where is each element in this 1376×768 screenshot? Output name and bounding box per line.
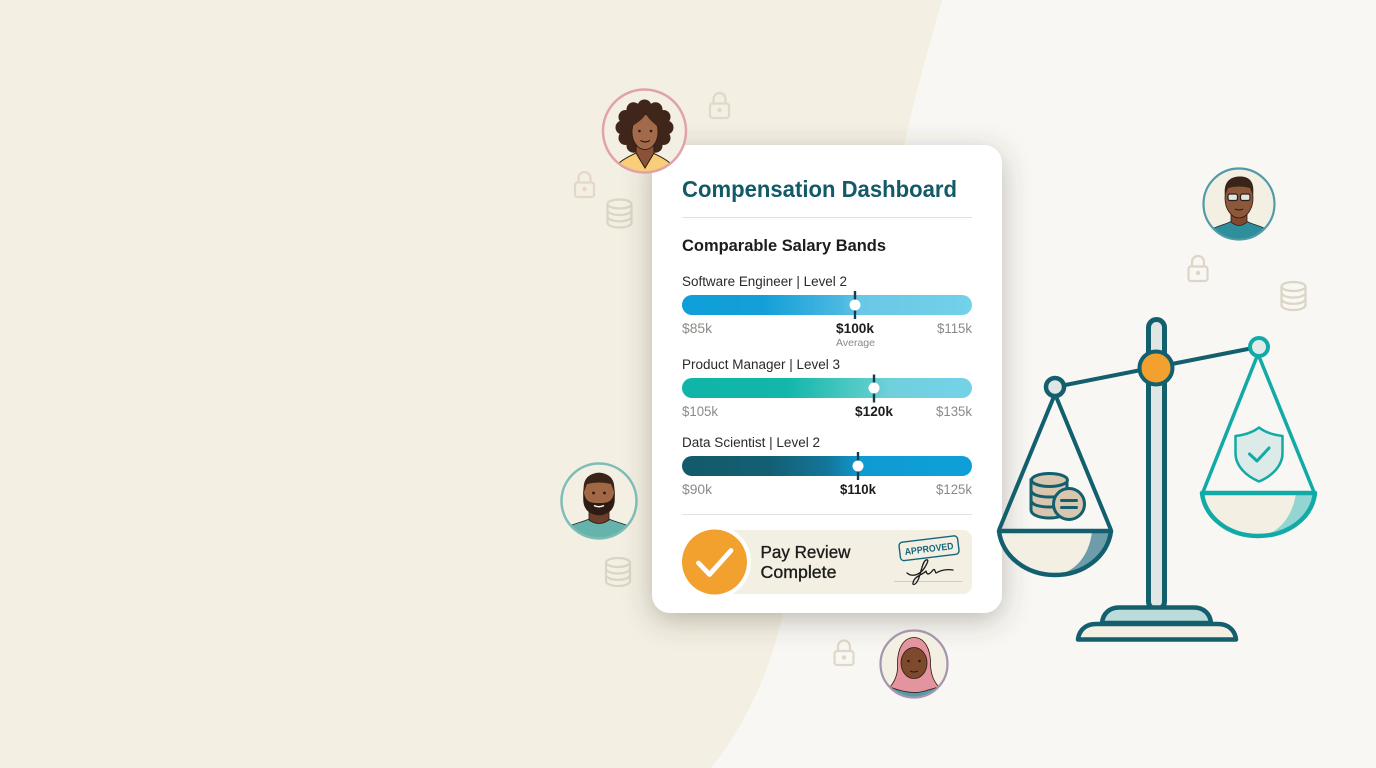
avatar: man with glasses <box>1200 168 1278 245</box>
band: product manager: $105k <box>682 404 718 419</box>
status: pay review complete: Pay Review <box>760 542 851 562</box>
band: data scientist: $110k <box>840 482 876 497</box>
stamp: approved <box>899 535 959 561</box>
band: software engineer: Average <box>836 337 875 349</box>
band: product manager: $120k <box>855 404 893 419</box>
icon: coin stack <box>1031 474 1084 520</box>
band: data scientist: Data Scientist | Level 2 <box>682 435 820 450</box>
right pan <box>1202 338 1320 540</box>
icon: database left lower <box>606 558 630 586</box>
band: software engineer: $85k <box>682 321 712 336</box>
icon: lock top <box>710 93 729 118</box>
status: pay review complete: Complete <box>760 562 836 582</box>
icon: shield check <box>1236 428 1282 482</box>
icon: lock right <box>1188 256 1208 281</box>
band: product manager: $135k <box>936 404 972 419</box>
avatar: bearded man <box>560 464 638 548</box>
title: Compensation Dashboard <box>682 176 957 202</box>
icon: lock left <box>575 172 594 197</box>
signature <box>907 560 953 584</box>
band: software engineer: Software Engineer | Level 2 <box>682 274 847 289</box>
band: data scientist: $125k <box>936 482 972 497</box>
band: product manager: Product Manager | Level 3 <box>682 357 840 372</box>
icon: database right <box>1282 282 1306 310</box>
icon: orange check <box>682 530 747 594</box>
band: software engineer: $100k <box>836 321 874 336</box>
band: software engineer: $115k <box>937 321 972 336</box>
pivot <box>1140 352 1172 384</box>
panel: compensation dashboard card <box>652 145 1002 613</box>
status: pay review complete <box>678 526 972 598</box>
band: product manager <box>682 357 972 419</box>
left pan <box>999 378 1115 580</box>
illustration: balance scale <box>999 320 1320 640</box>
avatar: woman with curly hair <box>603 90 686 176</box>
curly hair <box>616 100 674 153</box>
icon: lock bottom <box>834 640 854 665</box>
heading: comparable salary bands: Comparable Salary Bands <box>682 237 886 255</box>
icon: database left upper <box>608 200 632 228</box>
stamp: approved: APPROVED <box>904 541 954 558</box>
band: data scientist <box>682 435 972 497</box>
scale post <box>1148 320 1164 610</box>
scale base <box>1078 608 1236 640</box>
band: data scientist: $90k <box>682 482 712 497</box>
scale beam <box>1055 347 1258 387</box>
band: software engineer <box>682 274 972 349</box>
avatar: woman in hijab <box>880 630 948 705</box>
